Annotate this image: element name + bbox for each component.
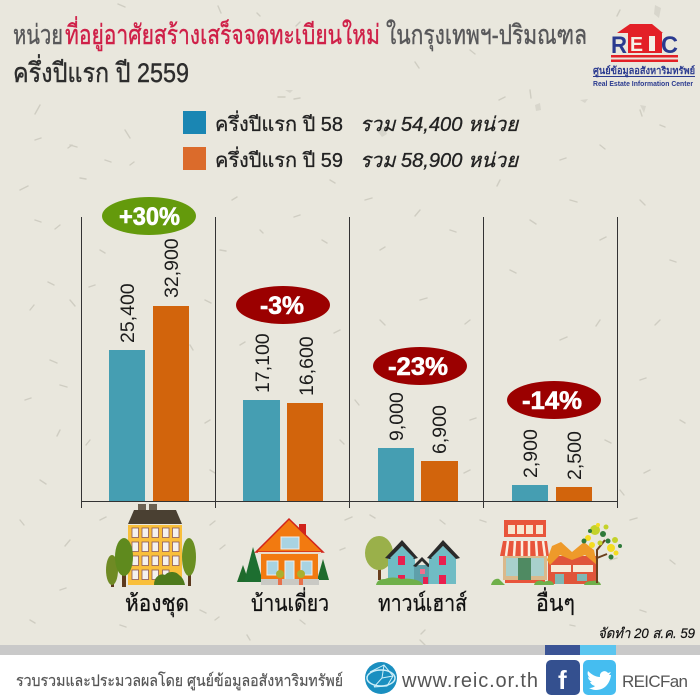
badge: -3%: -3% (260, 292, 304, 320)
bars: townhouse (378, 392, 458, 501)
logo: REIC: ศูนย์ข้อมูลอสังหาริมทรัพย์ (593, 65, 695, 78)
title: ในกรุงเทพฯ-ปริมณฑล (386, 19, 587, 52)
logo: REIC (593, 24, 695, 88)
logo: REIC: R (611, 32, 627, 59)
logo: REIC: E (630, 34, 643, 56)
icon: shop and houses (491, 520, 622, 585)
title: หน่วย (13, 20, 63, 50)
bars: detached house (243, 333, 323, 501)
legend row: first half 2016: รวม 58,900 หน่วย (360, 150, 519, 172)
bars: detached house: 16,600 (296, 336, 318, 396)
badge: -14%: -14% (522, 387, 582, 415)
bars: others (512, 429, 592, 501)
bars: detached house: 17,100 (252, 333, 274, 393)
badge: -23% (373, 347, 467, 385)
label: detached house: บ้านเดี่ยว (251, 587, 329, 616)
logo: REIC: Real Estate Information Center (593, 81, 693, 88)
legend row: first half 2016: ครึ่งปีแรก ปี 59 (215, 146, 343, 172)
bars: townhouse: 9,000 (386, 392, 408, 441)
social handle: REICFan (622, 672, 688, 691)
bars: condominium: 25,400 (117, 283, 139, 343)
bar chart (81, 217, 618, 508)
bars: condominium (109, 238, 189, 501)
badge: -14% (507, 381, 601, 419)
icon: facebook (546, 660, 580, 695)
title: ครึ่งปีแรก ปี 2559 (13, 54, 189, 88)
legend row: first half 2016 (183, 146, 519, 172)
badge: -23%: -23% (388, 353, 448, 381)
date note: จัดทำ 20 ส.ค. 59 (598, 625, 695, 641)
badge: +30%: +30% (119, 203, 180, 231)
legend row: first half 2015: ครึ่งปีแรก ปี 58 (215, 110, 343, 136)
label: others: อื่นๆ (536, 587, 575, 616)
icon: detached house (237, 519, 329, 585)
icon: townhouses (365, 536, 460, 585)
title (13, 16, 587, 88)
badge: +30% (102, 197, 196, 235)
label: condominium: ห้องชุด (125, 590, 189, 617)
website url: www.reic.or.th (401, 670, 538, 692)
icon: condominium building (106, 504, 196, 587)
logo: REIC: C (661, 32, 678, 59)
bars: townhouse: 6,900 (429, 405, 451, 454)
label: townhouse: ทาวน์เฮาส์ (378, 590, 467, 616)
legend row: first half 2015 (183, 110, 519, 136)
icon: twitter (583, 660, 616, 695)
footer credit text: รวบรวมและประมวลผลโดย ศูนย์ข้อมูลอสังหาริมทรัพย์ (16, 671, 343, 691)
title: ที่อยู่อาศัยสร้างเสร็จจดทะเบียนใหม่ (65, 16, 380, 51)
icon: facebook: f (558, 665, 567, 695)
legend (183, 110, 519, 172)
bars: others: 2,500 (564, 431, 586, 480)
badge: -3% (236, 286, 330, 324)
bars: others: 2,900 (520, 429, 542, 478)
bars: condominium: 32,900 (161, 238, 183, 298)
legend row: first half 2015: รวม 54,400 หน่วย (360, 114, 519, 136)
footer (0, 645, 700, 700)
icon: globe (365, 662, 397, 694)
